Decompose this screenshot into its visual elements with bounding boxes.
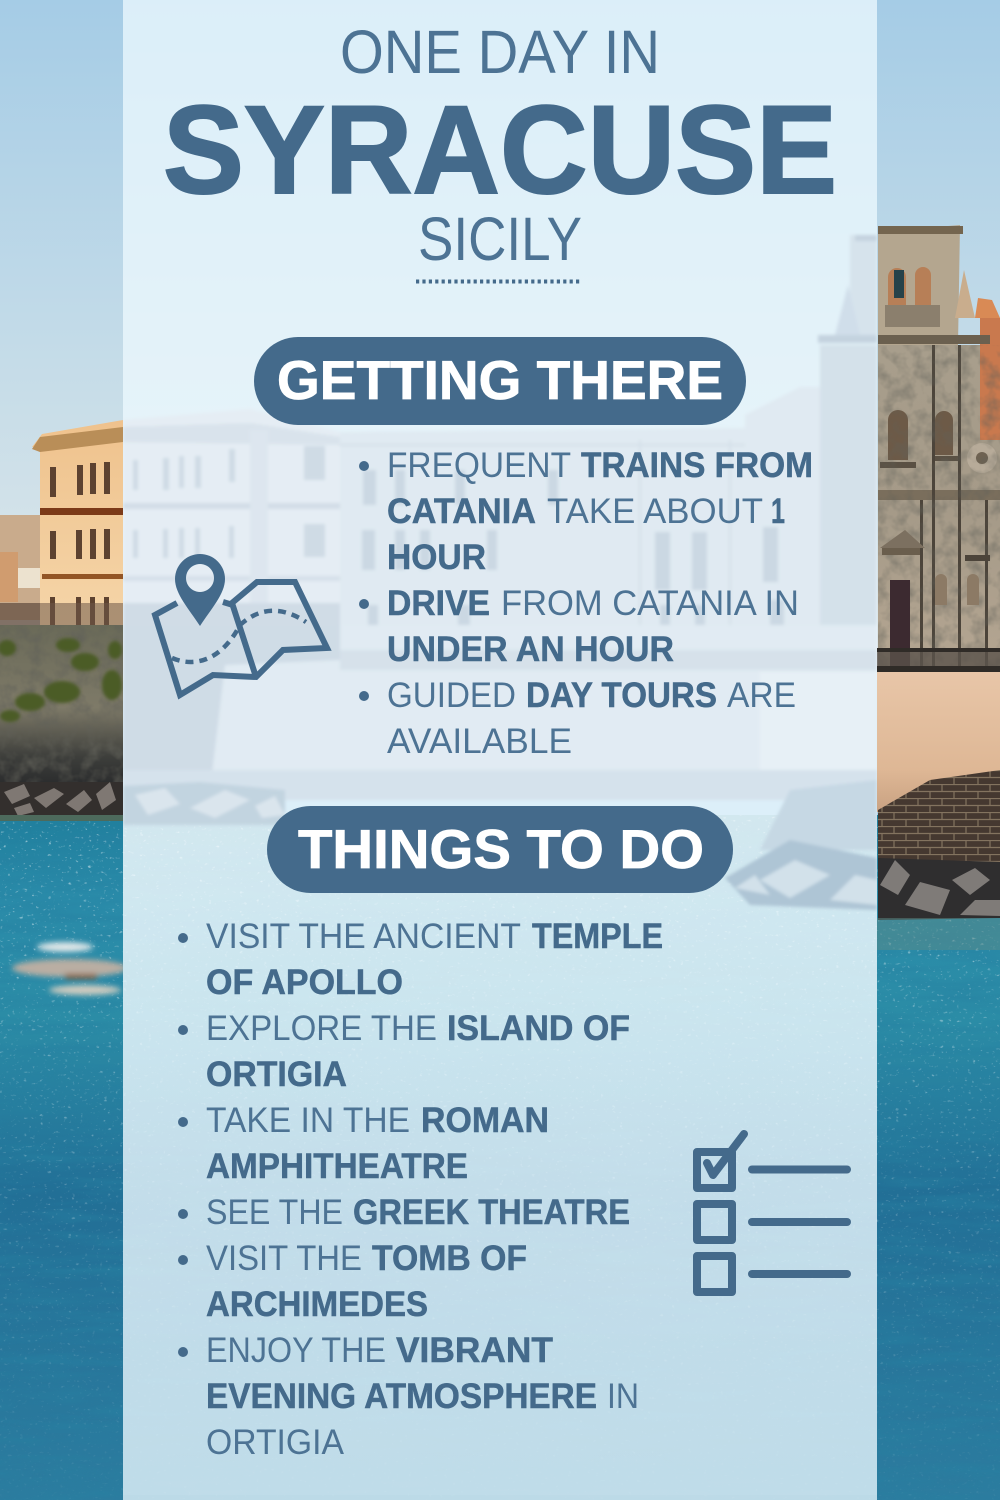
heading pill: things to do: THINGS TO DO	[298, 818, 704, 880]
item: trains from Catania: CATANIA	[387, 492, 536, 531]
seawall beneath the church	[877, 672, 1000, 870]
ghost: brighter water	[123, 815, 877, 1230]
item: vibrant evening atmosphere: IN	[607, 1377, 639, 1416]
translucent centre panel	[123, 0, 877, 1500]
subtitle: Sicily: SICILY	[418, 205, 582, 273]
sandbar in the water	[12, 942, 128, 995]
sky	[0, 0, 1000, 680]
item: vibrant evening atmosphere: ORTIGIA	[206, 1423, 345, 1462]
item: temple of Apollo: TEMPLE	[532, 917, 663, 956]
item: Greek theatre: SEE THE	[206, 1193, 343, 1232]
heading pill: getting there	[254, 337, 746, 425]
scene visible outside the panel	[0, 225, 1000, 995]
ghost: seawall	[123, 625, 877, 800]
item: island of Ortigia: ORTIGIA	[206, 1055, 347, 1094]
ghost: left rocks	[123, 782, 285, 825]
item: guided day tours: GUIDED	[387, 676, 516, 715]
item: tomb of Archimedes: ARCHIMEDES	[206, 1285, 428, 1324]
item: drive from Catania: UNDER AN HOUR	[387, 630, 674, 669]
item: island of Ortigia	[206, 1009, 630, 1094]
church on the right	[877, 225, 1000, 675]
ghost: right brick wall and rocks	[725, 780, 877, 910]
left cliff with shrubs	[0, 625, 123, 790]
left rocks	[0, 782, 123, 821]
item: Roman amphitheatre	[206, 1101, 549, 1186]
distant town at left	[0, 515, 42, 625]
item: guided day tours: AVAILABLE	[387, 722, 572, 761]
ghost: church tower	[818, 235, 877, 645]
item: guided day tours	[387, 676, 796, 761]
item: trains from Catania: 1	[771, 492, 785, 531]
greenish shallows by the rocks	[877, 918, 1000, 950]
item: vibrant evening atmosphere: ENJOY THE	[206, 1331, 386, 1370]
item: vibrant evening atmosphere: VIBRANT	[396, 1331, 553, 1370]
item: temple of Apollo	[206, 917, 663, 1002]
item: tomb of Archimedes	[206, 1239, 527, 1324]
item: trains from Catania: FREQUENT	[387, 446, 571, 485]
item: vibrant evening atmosphere	[206, 1331, 639, 1462]
item: Roman amphitheatre: TAKE IN THE	[206, 1101, 410, 1140]
faded photo details seen through the panel	[123, 234, 877, 1230]
item: trains from Catania: TRAINS FROM	[581, 446, 813, 485]
item: Roman amphitheatre: AMPHITHEATRE	[206, 1147, 468, 1186]
title block	[163, 18, 837, 282]
icon: checklist	[697, 1134, 847, 1292]
bullet points	[178, 933, 188, 1357]
item: vibrant evening atmosphere: EVENING ATMOSPHERE	[206, 1377, 597, 1416]
item: trains from Catania: HOUR	[387, 538, 486, 577]
item: drive from Catania: DRIVE	[387, 584, 490, 623]
heading pill: things to do	[267, 806, 733, 893]
orange palazzo	[0, 420, 123, 625]
item: Greek theatre	[206, 1193, 630, 1232]
item: tomb of Archimedes: TOMB OF	[372, 1239, 527, 1278]
dotted underline	[416, 280, 581, 284]
title line: one day in: ONE DAY IN	[340, 18, 660, 86]
icon: map with location pin	[155, 554, 327, 695]
item: Greek theatre: GREEK THEATRE	[353, 1193, 630, 1232]
item: drive from Catania: FROM CATANIA IN	[501, 584, 799, 623]
list: things to do	[178, 917, 663, 1462]
item: island of Ortigia: ISLAND OF	[447, 1009, 630, 1048]
ghost: central buildings	[340, 387, 877, 672]
item: drive from Catania	[387, 584, 799, 669]
item: guided day tours: ARE	[727, 676, 796, 715]
item: guided day tours: DAY TOURS	[526, 676, 717, 715]
bullet points	[359, 461, 369, 701]
item: Roman amphitheatre: ROMAN	[421, 1101, 549, 1140]
item: trains from Catania: TAKE ABOUT	[547, 492, 763, 531]
right rocks	[878, 858, 1000, 920]
item: temple of Apollo: VISIT THE ANCIENT	[206, 917, 521, 956]
title: Syracuse: SYRACUSE	[163, 81, 837, 220]
list: getting there	[359, 446, 813, 761]
heading pill: getting there: GETTING THERE	[277, 349, 723, 411]
item: trains from Catania	[387, 446, 813, 577]
item: tomb of Archimedes: VISIT THE	[206, 1239, 362, 1278]
item: island of Ortigia: EXPLORE THE	[206, 1009, 437, 1048]
item: temple of Apollo: OF APOLLO	[206, 963, 403, 1002]
ghost: white palazzo	[123, 409, 340, 625]
sea	[0, 815, 1000, 1500]
